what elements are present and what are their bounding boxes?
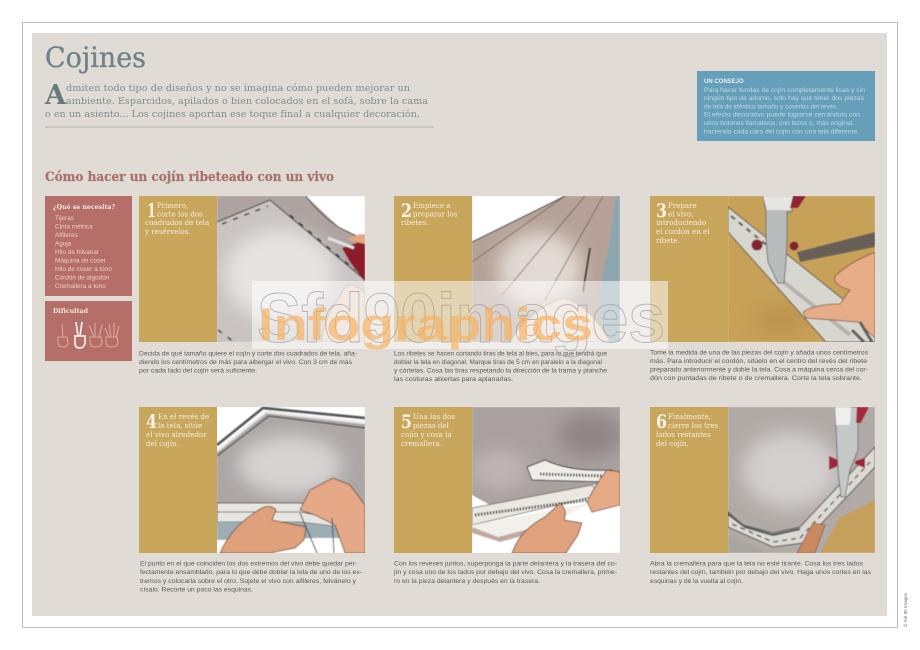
step title 3: ribete.: [656, 236, 680, 245]
step 4: [139, 407, 365, 594]
step text 2: Los ribetes se hacen cortando tiras de tela al bies, para lo que tendrá que: [394, 350, 607, 358]
step title 5: [401, 412, 455, 448]
step text 4: císalo. Recorte un poco las esquinas.: [140, 586, 253, 594]
step text 6: restantes del cojín, también por debajo del vivo. Haga unos cortes en las: [650, 569, 872, 576]
step text 1: [139, 350, 357, 374]
panel: materials: ¿Qué se necesita?: [53, 203, 115, 211]
title: Cojines: [45, 41, 146, 74]
step title 1: corte los dos: [157, 210, 203, 218]
icon: hand three fingers: [89, 323, 102, 347]
panel: materials: Cremallera a tono: [55, 283, 106, 290]
gold title panel 2: [394, 196, 472, 342]
step title 2: Empiece a: [413, 201, 451, 210]
intro text: ambiente. Esparcidos, apilados o bien colocados en el sofá, sobre la cama: [66, 96, 428, 107]
step title 4: del cojín.: [146, 439, 179, 448]
step title 2: [401, 201, 458, 227]
step title 3: [656, 201, 710, 245]
step text 6: Abra la cremallera para que la tela no esté tirante. Cosa los tres lados: [650, 560, 864, 568]
step 5: [393, 407, 622, 585]
callout: un consejo: [697, 71, 875, 141]
step text 3: preparado anteriormente y doble la tela. Cosa a máquina cerca del cor-: [650, 366, 868, 374]
step text 3: dón con puntadas de ribete o de cremallera. Corte la tela sobrante.: [650, 375, 862, 382]
step title 2: ribetes.: [401, 218, 428, 227]
step text 6: [650, 560, 872, 585]
step title 6: [656, 412, 719, 448]
illustration: joining with zipper: [472, 407, 622, 553]
step title 6: Finalmente,: [668, 412, 711, 421]
step title 3: el cordón en el: [656, 227, 710, 236]
intro text: [44, 80, 428, 120]
step title 3: introduciendo: [656, 218, 706, 227]
step title 2: preparar los: [413, 210, 458, 218]
step 2: [394, 196, 620, 383]
step title 5: cojín y cosa la: [401, 430, 452, 439]
step text 5: ro en la pieza delantera y después en la trasera.: [394, 578, 540, 585]
step 1: [139, 196, 365, 374]
panel: materials: Cinta métrica: [55, 224, 93, 230]
step title 3: el vivo,: [668, 210, 694, 218]
step title 4: el vivo alrededor: [146, 430, 207, 439]
icon: hand one finger: [58, 324, 68, 347]
step text 5: Con los reveses juntos, superponga la parte delantera y la trasera del co-: [394, 560, 617, 568]
step title 4: En el revés de: [158, 412, 209, 421]
callout: un consejo: UN CONSEJO: [704, 79, 744, 85]
panel: materials: Aguja: [55, 240, 72, 248]
gold title panel 6: [650, 407, 728, 553]
illustration: sewing the piping: [728, 196, 875, 342]
step 6: [650, 407, 875, 585]
step title 5: Una las dos: [413, 412, 455, 421]
step title 1: cuadrados de tela: [145, 218, 210, 227]
step text 5: jín y cosa uno de los lados por debajo del vivo. Cosa la cremallera, prime-: [393, 569, 617, 576]
step title 3: Prepare: [668, 201, 697, 210]
step title 5: cremallera.: [401, 439, 442, 448]
step text 3: Tome la medida de una de las piezas del cojín y añada unos centímetros: [650, 350, 869, 356]
step text 4: [140, 560, 362, 594]
callout: un consejo: haciendo cada cara del cojín con una tela diferente.: [704, 130, 859, 136]
step title 4: la tela, sitúe: [158, 421, 202, 430]
intro text: dmiten todo tipo de diseños y no se imagina cómo pueden mejorar un: [66, 83, 410, 94]
copyright credit: © Sol 90 Images: [902, 592, 908, 627]
step text 1: Decida de qué tamaño quiere el cojín y corte dos cuadrados de tela, aña-: [139, 350, 357, 358]
intro text: o en un asiento... Los cojines aportan ese toque final a cualquier decoración.: [45, 109, 420, 120]
panel: materials: Alfileres: [55, 232, 78, 239]
gold title panel 3: [650, 196, 728, 342]
step text 3: [650, 350, 869, 382]
watermark: Infographics: [258, 299, 593, 350]
step number 6: 6: [656, 411, 667, 433]
step text 2: las costuras abiertas para aplanarlas.: [394, 376, 513, 383]
step text 4: tremos y colocarla sobre el otro. Sujete el vivo con alfileres, felvánelo y: [140, 578, 357, 585]
gold title panel 5: [394, 407, 472, 553]
step text 4: fectamente ensamblado, para lo que debe doblar la tela de uno de los ex-: [140, 569, 362, 576]
callout: un consejo: Para hacer fundas de cojín completamente lisas y sin: [704, 88, 865, 94]
panel: materials: Tijeras: [55, 215, 74, 222]
illustration: placing the piping: [217, 407, 365, 553]
step text 3: más. Para introducir el cordón, sitúelo en el centro del revés del ribete: [650, 358, 867, 365]
step text 1: por cada lado del cojín será suficiente.: [139, 368, 257, 374]
step number 2: 2: [401, 200, 412, 222]
icon: hand four fingers: [105, 323, 119, 347]
step number 4: 4: [146, 411, 157, 433]
callout: un consejo: ningún tipo de adorno, sólo hay que tener dos piezas: [704, 96, 864, 102]
step number 1: 1: [147, 200, 156, 222]
step title 6: lados restantes: [656, 430, 711, 439]
step number 5: 5: [401, 411, 412, 433]
step title 5: piezas del: [413, 421, 450, 430]
panel: materials: [45, 196, 132, 296]
illustration: sewing final sides: [728, 407, 875, 553]
gold title panel 1: [139, 196, 217, 342]
step text 5: [393, 560, 617, 585]
watermark: Sfd90images: [257, 279, 665, 357]
step title 1: y resérvelos.: [144, 227, 191, 236]
callout: un consejo: unos botones llamativos, con lazos o, más original,: [704, 121, 854, 127]
step text 2: [394, 350, 607, 383]
panel: materials: Hilo de hilvanar: [55, 249, 100, 256]
step text 2: y córtelas. Cosa las tiras respetando la dirección de la trama y planche: [394, 368, 607, 374]
step title 4: [146, 412, 209, 448]
illustration: marking strips: [472, 196, 620, 342]
callout: un consejo: de tela de idéntico tamaño y coserlas del revés.: [704, 104, 838, 110]
callout: un consejo: El efecto decorativo puede lograrse cerrándola con: [704, 112, 860, 118]
step 3: [650, 196, 875, 382]
illustration: cutting fabric: [217, 196, 365, 342]
drop cap: A: [44, 80, 67, 111]
step title 1: [144, 201, 210, 236]
section heading: Cómo hacer un cojín ribeteado con un vivo: [45, 170, 334, 185]
step title 6: cierre los tres: [668, 421, 719, 430]
panel: materials: Hilo de coser a tono: [55, 266, 112, 273]
step title 1: Primero,: [157, 201, 188, 210]
step number 3: 3: [656, 200, 667, 222]
gold title panel 4: [139, 407, 217, 553]
step title 6: del cojín.: [656, 439, 689, 448]
panel: materials: Máquina de coser: [55, 258, 107, 264]
icon: hand two fingers highlighted: [75, 322, 85, 348]
panel: materials: Cordón de algodón: [55, 274, 110, 282]
panel: difficulty: [45, 301, 132, 361]
step text 6: esquinas y dé la vuelta al cojín.: [650, 578, 743, 585]
panel: difficulty: Dificultad: [53, 307, 88, 315]
step text 1: diendo los centímetros de más para albergar el vivo. Con 3 cm de más: [139, 359, 353, 366]
step text 4: El punto en el que coinciden los dos extremos del vivo debe quedar per-: [140, 560, 357, 568]
step text 2: doblar la tela en diagonal. Marque tiras de 5 cm en paralelo a la diagonal: [394, 359, 603, 366]
